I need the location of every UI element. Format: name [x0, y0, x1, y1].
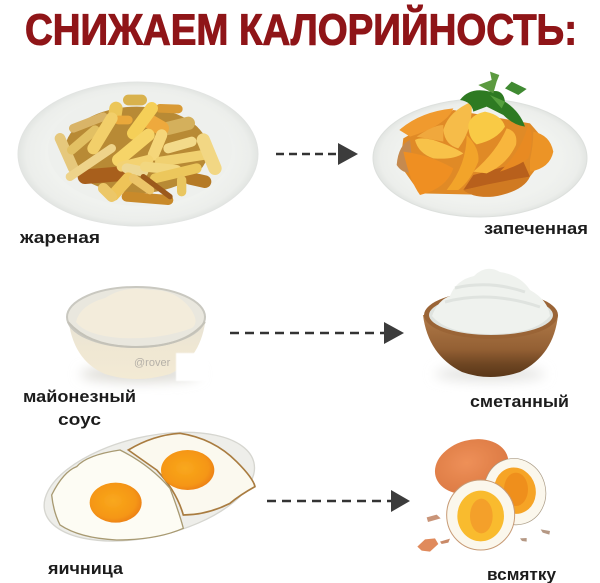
label: sour cream: сметанный: [470, 392, 569, 411]
fried potato sticks: [60, 100, 215, 200]
arrow: fried eggs to soft-boiled: [267, 490, 410, 512]
panel: baked potato wedges on plate: [373, 72, 587, 217]
label: fried eggs: яичница: [47, 559, 124, 578]
arrow: fried to baked: [276, 143, 358, 165]
arrow: mayo to sour cream: [230, 322, 404, 344]
yolk: [90, 483, 142, 523]
panel: fried potatoes on plate: [18, 82, 258, 226]
label: mayonnaise sauce: [23, 387, 136, 429]
panel: mayonnaise bowl: [67, 287, 208, 382]
baked wedges: [397, 102, 553, 197]
whole egg: [429, 431, 515, 502]
panel: sour cream wooden bowl: [423, 269, 558, 381]
egg half, back: [477, 452, 553, 532]
label: mayonnaise sauce: майонезный: [23, 387, 136, 406]
parsley: [460, 72, 527, 127]
label: fried: жареная: [19, 228, 100, 247]
label: mayonnaise sauce: соус: [58, 410, 101, 429]
panel: soft-boiled eggs: [417, 431, 553, 552]
shell fragments: [417, 515, 550, 552]
panel: fried eggs on plate: [34, 414, 265, 560]
yolk: [161, 450, 214, 490]
watermark: @rover: [134, 357, 171, 369]
label: baked: запеченная: [484, 219, 588, 238]
egg half, front: [447, 480, 515, 550]
